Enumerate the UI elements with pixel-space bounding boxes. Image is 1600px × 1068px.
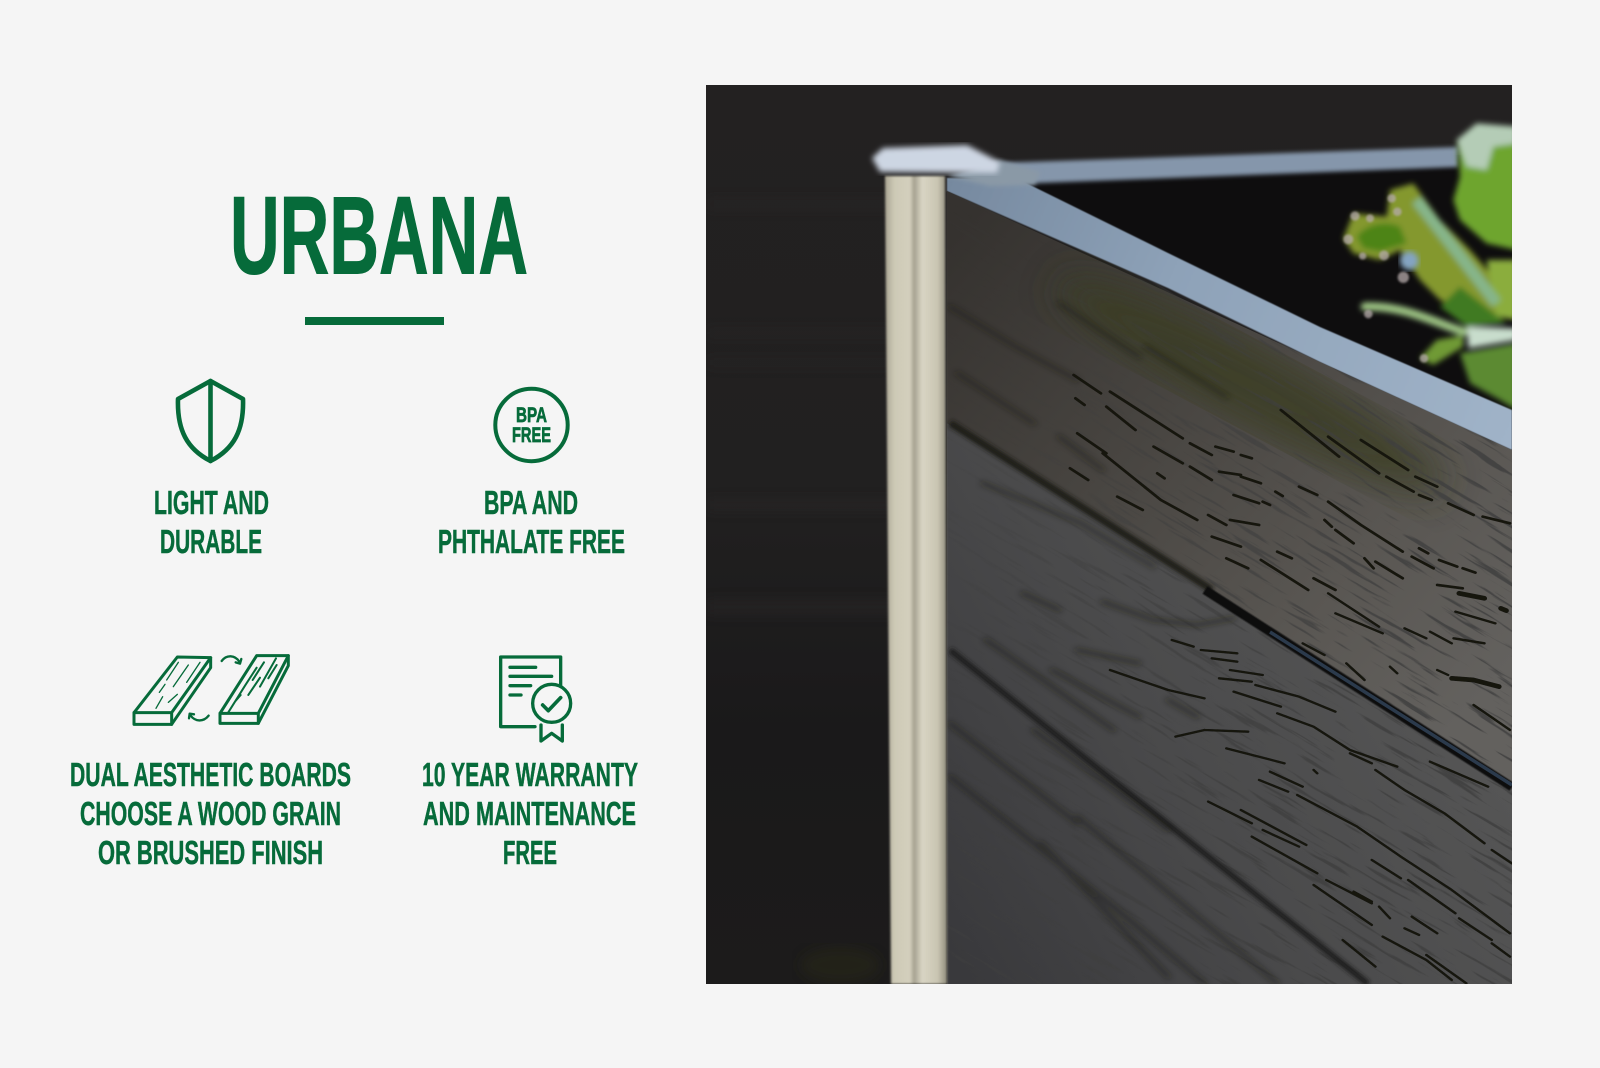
infographic canvas	[71, 85, 1512, 984]
feature: dual aesthetic boards	[70, 656, 351, 871]
leaf: mid right	[1487, 260, 1517, 320]
soft grain, lower left	[950, 593, 1277, 983]
label: BPA and phthalate free: BPA AND	[484, 484, 578, 521]
label: dual aesthetic boards: DUAL AESTHETIC BOARDS	[70, 756, 351, 793]
label: 10 year warranty and maintenance free: AND MAINTENANCE	[423, 795, 636, 832]
dark interior of bed	[1032, 165, 1512, 410]
upper board	[947, 191, 1512, 790]
feature: BPA free	[438, 389, 625, 560]
photo: raised garden bed corner	[706, 85, 1517, 984]
composite panel boards	[947, 191, 1512, 984]
title underline	[305, 317, 444, 325]
label: BPA and phthalate free: PHTHALATE FREE	[438, 523, 625, 560]
label: dual aesthetic boards: CHOOSE A WOOD GRAIN	[80, 795, 341, 832]
title: URBANA	[230, 174, 528, 298]
crisp grain, lower right	[1110, 593, 1512, 983]
leaf: frilled left	[1343, 183, 1505, 317]
leaf: lower small	[1420, 335, 1463, 365]
dark blurred background	[706, 85, 1512, 984]
post cap	[872, 145, 1000, 173]
leaf: pale stalk	[1417, 200, 1497, 303]
icon: BPA free badge: FREE	[512, 424, 551, 447]
icon: BPA free badge: BPA	[516, 404, 547, 427]
wood grain texture	[1136, 284, 1512, 984]
far rail	[1000, 147, 1458, 184]
leaf: top right	[1450, 140, 1512, 254]
leaf: dark centre	[1440, 287, 1507, 327]
crisp grain, right of upper board	[1070, 375, 1510, 590]
water droplets	[1343, 194, 1428, 363]
feature: light and durable	[154, 381, 269, 560]
leaf: lower right	[1460, 343, 1517, 410]
upper-area grain strokes	[950, 303, 1510, 590]
label: dual aesthetic boards: OR BRUSHED FINISH	[98, 834, 323, 871]
lettuce leaves	[1343, 123, 1517, 410]
icon: BPA free badge	[495, 389, 568, 461]
icon: two boards with swap arrows	[134, 656, 288, 724]
corner post	[885, 176, 947, 984]
grass hint	[800, 947, 880, 983]
leaf: thin stem	[1365, 307, 1463, 332]
label: light and durable: LIGHT AND	[154, 484, 269, 521]
label: 10 year warranty and maintenance free: 10 YEAR WARRANTY	[422, 756, 638, 793]
seam lines	[950, 423, 1212, 590]
near top rail	[947, 178, 1512, 450]
leaf: pale highlight	[1467, 327, 1517, 348]
label: light and durable: DURABLE	[160, 523, 262, 560]
icon: shield	[178, 381, 243, 461]
feature: 10 year warranty	[422, 657, 638, 871]
lower boards	[947, 423, 1512, 984]
moss tint	[1062, 274, 1456, 510]
icon: certificate with ribbon	[501, 657, 571, 741]
rail joint	[947, 160, 1040, 186]
blurred grain, left of upper board	[950, 303, 1226, 567]
label: 10 year warranty and maintenance free: FREE	[503, 834, 557, 871]
lower-area grain strokes	[950, 593, 1512, 983]
